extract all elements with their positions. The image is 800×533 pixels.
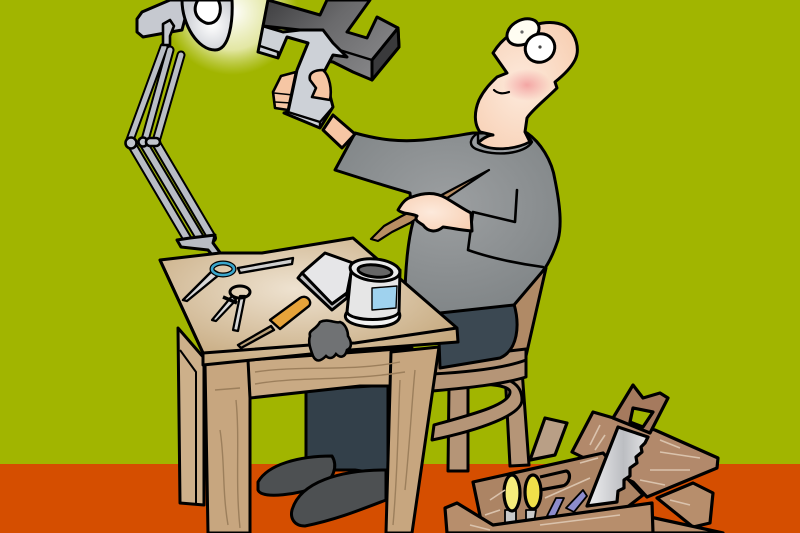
- cheek blush: [503, 69, 551, 101]
- lamp light glow: [166, 0, 298, 75]
- toolbox handle slot: [540, 471, 569, 490]
- wood grain on toolbox: [470, 425, 700, 530]
- neck and head: [475, 22, 577, 149]
- sign dark painted face: [263, 0, 399, 80]
- forearm skin: [323, 115, 355, 148]
- trousers and shoes: [258, 304, 517, 526]
- paintbrush: [371, 170, 489, 241]
- pupil left: [520, 30, 524, 34]
- pincers: [212, 286, 250, 331]
- sleeve fold: [468, 190, 543, 267]
- table top: [160, 238, 458, 365]
- front left leg: [205, 360, 250, 533]
- side shadow face: [372, 28, 399, 80]
- paint can: [345, 256, 401, 327]
- toolbox and tools: [445, 385, 723, 533]
- lower arm rods: [132, 143, 212, 240]
- back leg: [178, 328, 204, 505]
- screwdriver: [238, 297, 310, 348]
- wood block: [657, 483, 713, 527]
- lamp reflector dish: [182, 0, 232, 50]
- plank behind: [530, 418, 567, 460]
- toolbox back panel: [473, 453, 643, 530]
- saw handle: [613, 385, 668, 433]
- pupil right: [538, 45, 542, 49]
- chair: [432, 268, 546, 471]
- sign unpainted stem: [258, 26, 347, 128]
- smile: [494, 90, 509, 93]
- collar: [471, 132, 532, 153]
- workbench: [160, 238, 458, 533]
- toolbox front: [445, 503, 653, 533]
- back leg brace: [180, 350, 196, 504]
- chisel and tool handles: [505, 510, 516, 523]
- scissors: [183, 258, 293, 301]
- sweater: [335, 133, 560, 313]
- table front edge: [160, 260, 457, 353]
- wood grain on bench: [215, 362, 415, 528]
- anglepoise lamp: [126, 0, 232, 262]
- paint block on table: [298, 253, 353, 310]
- eye left: [502, 13, 544, 51]
- upper arm rods: [130, 47, 181, 140]
- person: [323, 13, 577, 313]
- lamp head housing: [137, 0, 190, 37]
- holding hand: [273, 70, 331, 110]
- stem lower edge: [260, 46, 333, 128]
- lamp bulb: [195, 0, 220, 23]
- table apron: [248, 348, 412, 398]
- front right leg: [386, 347, 439, 533]
- eye right: [520, 28, 560, 68]
- painting hand: [398, 193, 472, 231]
- lamp base clamp: [177, 235, 224, 262]
- letter sign held up: [258, 0, 399, 128]
- board behind: [572, 412, 718, 497]
- background: orange floor: [0, 464, 800, 533]
- lamp elbow joint: [126, 138, 160, 148]
- paint blob on the table edge: [309, 321, 351, 360]
- saw blade: [587, 427, 648, 506]
- lamp neck joint: [163, 20, 174, 45]
